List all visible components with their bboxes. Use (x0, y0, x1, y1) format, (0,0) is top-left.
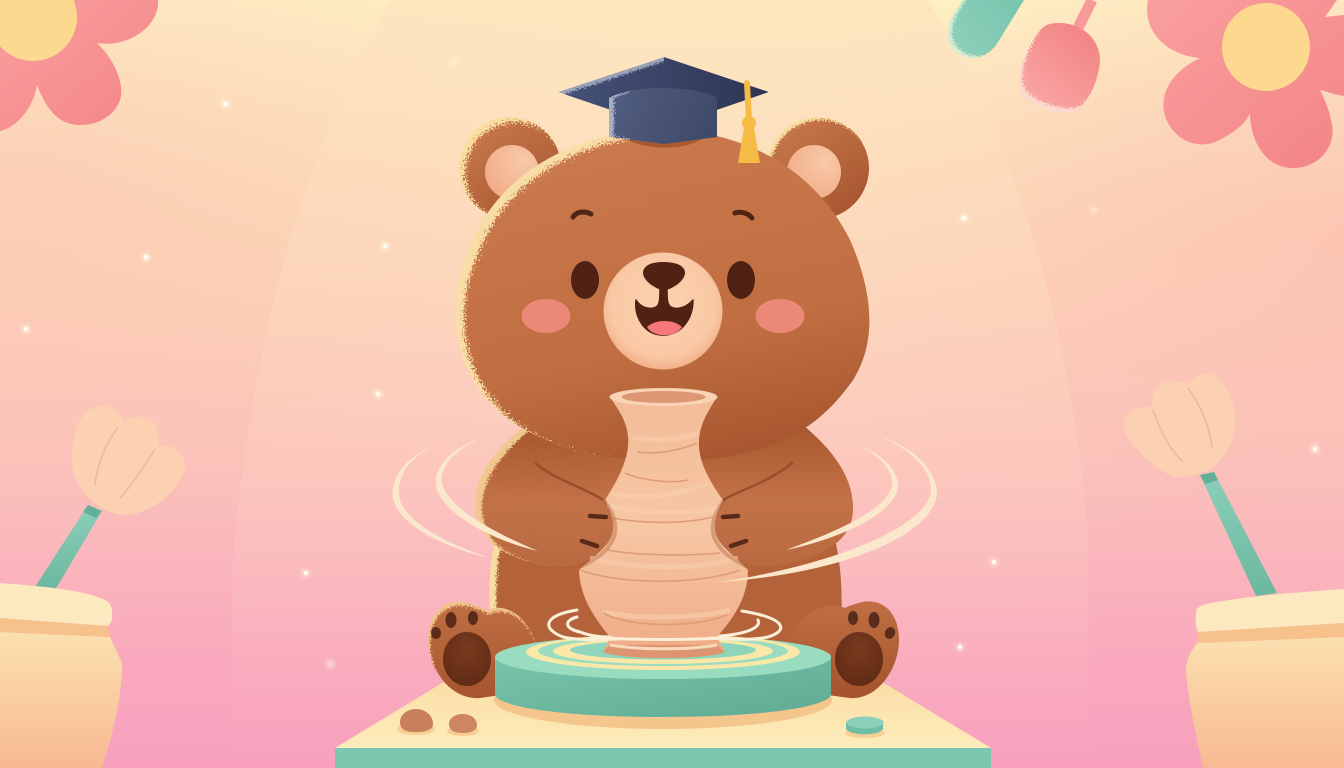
bear: torso (490, 540, 842, 643)
stem (35, 505, 102, 590)
bear: left ear (459, 117, 559, 214)
cap board (558, 57, 768, 110)
table (335, 660, 991, 768)
flower top left (0, 0, 158, 131)
bear: head (455, 125, 885, 470)
right tulip in pot (1123, 374, 1344, 768)
pot (1186, 637, 1344, 768)
vase rim (610, 388, 718, 406)
tassel (738, 83, 760, 163)
stem (1200, 472, 1277, 596)
tulip (72, 406, 185, 515)
vase foot (603, 645, 725, 658)
vase bands (590, 433, 738, 617)
brush top: pink (1018, 0, 1100, 113)
wheel (494, 634, 832, 729)
bear: left foot (428, 601, 537, 702)
bear: right foot (790, 601, 899, 698)
mouth (636, 288, 693, 335)
nose (643, 262, 685, 290)
muzzle (604, 252, 722, 370)
motion swirls (393, 436, 937, 582)
clay lumps and sponge (397, 709, 885, 738)
cheeks (522, 299, 570, 333)
bear: arms and chest (475, 420, 860, 570)
bear: face (522, 212, 804, 370)
cap shadow on head (625, 136, 705, 148)
pot (0, 632, 122, 768)
bear (428, 117, 899, 702)
brush top: teal (946, 0, 1024, 58)
tulip (1123, 374, 1235, 477)
sparkles (22, 59, 1319, 668)
water rings at vase base (549, 610, 781, 640)
eyes (571, 261, 599, 299)
bear: right ear (767, 117, 872, 222)
brows (573, 212, 591, 217)
flower top right (1147, 0, 1344, 168)
graduation cap (558, 57, 770, 163)
cap skull (609, 88, 717, 144)
vase (579, 388, 748, 658)
hand details over vase (535, 462, 793, 566)
left tulip in pot (0, 406, 185, 768)
